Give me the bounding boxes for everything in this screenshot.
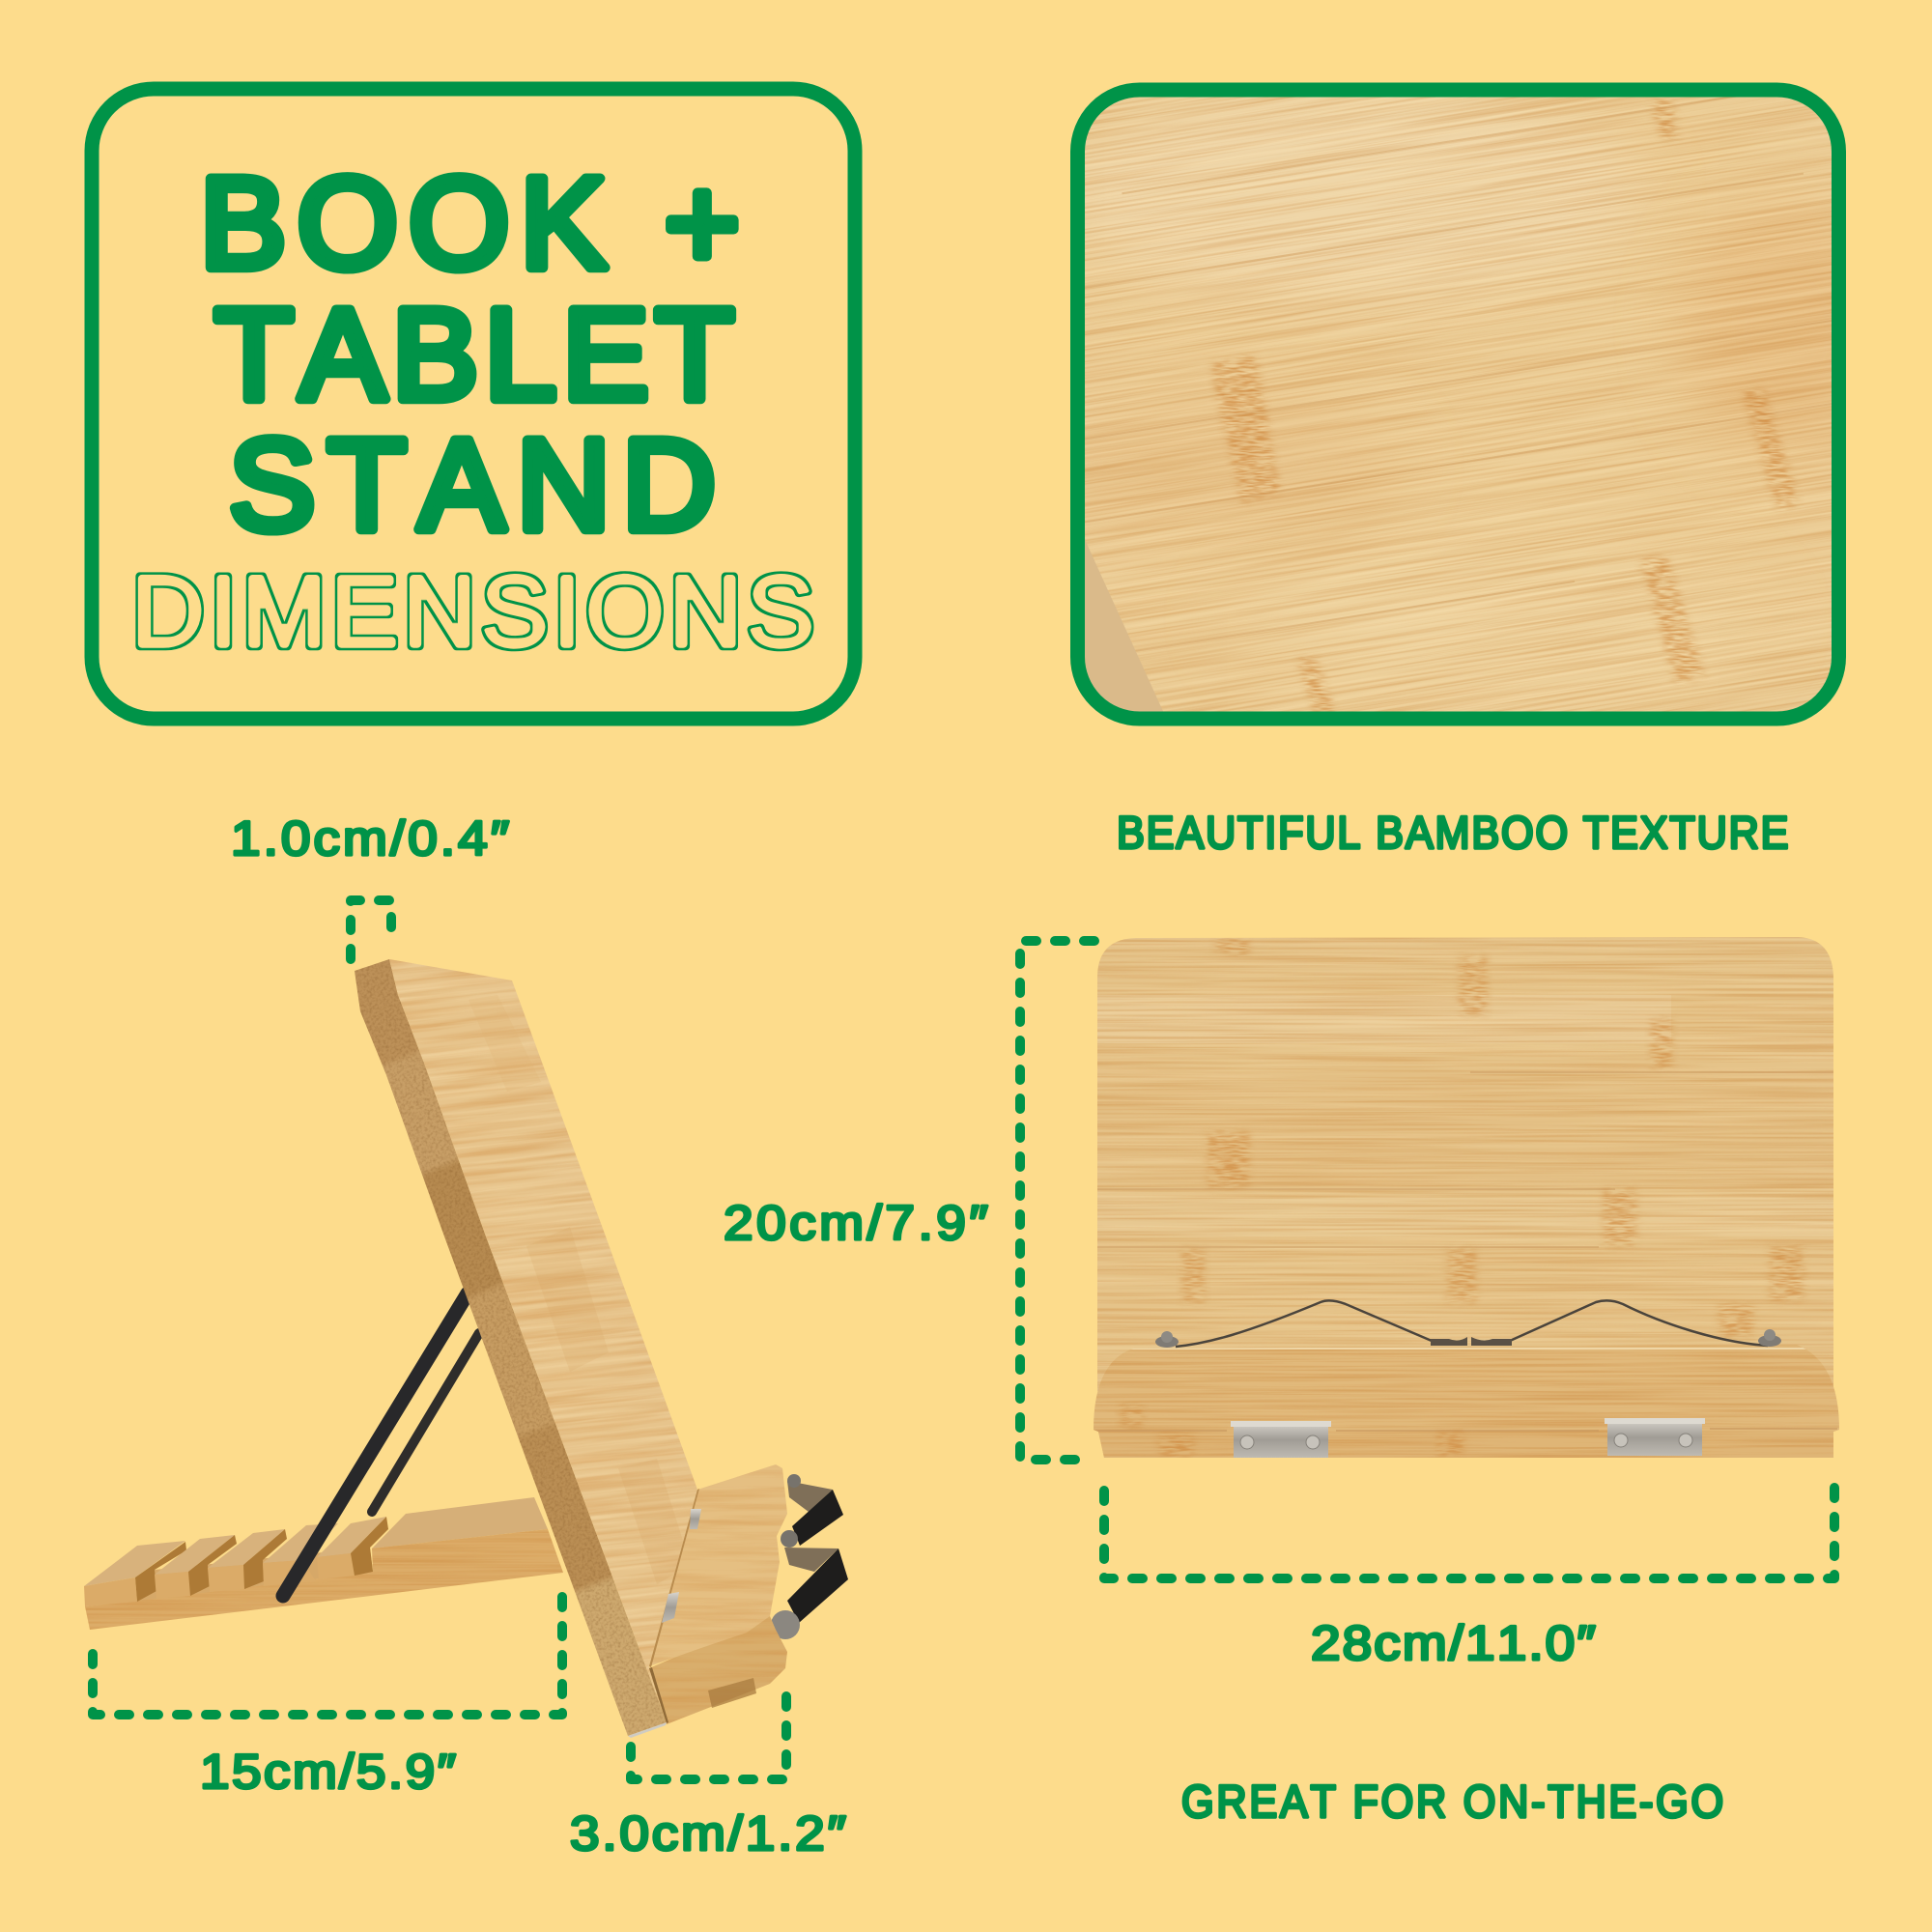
subtitle: dimensions outline: DIMENSIONS <box>131 555 814 668</box>
panel: title card <box>92 89 855 719</box>
tray <box>1092 1341 1841 1462</box>
dashed guide: height <box>1020 941 1094 1460</box>
photo: stand front view <box>1092 932 1841 1462</box>
cut edge of board <box>1085 539 1163 711</box>
photo of bamboo grain <box>1085 97 1832 711</box>
caption: bamboo texture: BEAUTIFUL BAMBOO TEXTURE <box>1117 807 1789 858</box>
upright board <box>1092 932 1841 1396</box>
upright board face <box>389 959 697 1710</box>
back top <box>372 1497 548 1548</box>
panel: bamboo texture photo <box>1070 83 1846 726</box>
bamboo nodes <box>1182 939 1804 1336</box>
photo: stand side view <box>84 959 848 1738</box>
dashed guide: width <box>1104 1479 1834 1578</box>
support bars <box>283 1293 479 1596</box>
label: height: 20cm/7.9″ <box>724 1196 988 1250</box>
slot floor <box>137 1548 373 1602</box>
dashed guide: tray depth <box>631 1686 786 1779</box>
title: STAND <box>229 413 716 557</box>
label: width: 28cm/11.0″ <box>1311 1616 1596 1670</box>
photo frame <box>1078 90 1839 719</box>
title: BOOK + <box>200 152 740 296</box>
front tray <box>628 1464 787 1738</box>
dashed guide: thickness <box>351 900 391 959</box>
rail <box>85 1529 563 1630</box>
page clip wire <box>1155 1300 1781 1348</box>
dashed guide: base depth <box>93 1596 562 1715</box>
title <box>200 152 740 557</box>
upright board edge <box>355 959 667 1736</box>
slotted blocks <box>84 1517 388 1606</box>
hinges <box>1231 1418 1705 1458</box>
label: base depth: 15cm/5.9″ <box>200 1745 456 1799</box>
caption: on the go: GREAT FOR ON-THE-GO <box>1181 1776 1723 1827</box>
bamboo nodes <box>1210 99 1799 715</box>
label: thickness: 1.0cm/0.4″ <box>231 811 509 866</box>
title: TABLET <box>214 283 734 427</box>
straps <box>771 1474 848 1639</box>
label: tray depth: 3.0cm/1.2″ <box>570 1806 846 1861</box>
title card border <box>92 89 855 719</box>
base board <box>84 1497 563 1630</box>
